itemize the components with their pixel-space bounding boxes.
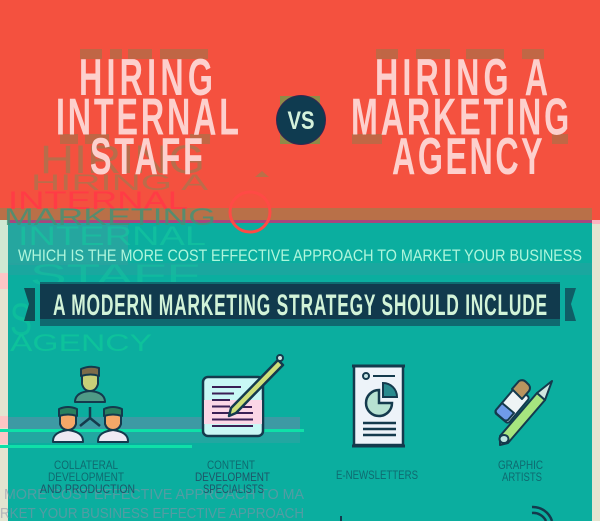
glitch ghost text: INTERNAL xyxy=(18,221,206,251)
caption: content: CONTENT xyxy=(207,458,256,472)
title: hiring internal staff xyxy=(56,49,239,186)
icon: pencil and eraser xyxy=(494,380,552,445)
caption: collateral: COLLATERAL xyxy=(54,458,118,472)
caption: graphic artists: GRAPHIC xyxy=(498,458,543,472)
caption: content xyxy=(195,458,271,496)
caption: e-newsletters: E-NEWSLETTERS xyxy=(336,468,418,482)
title: hiring a marketing agency xyxy=(351,49,569,186)
title: hiring a marketing agency: MARKETING xyxy=(351,89,569,147)
glitch ghost text: HIRING A xyxy=(31,170,209,195)
glitch ghost text: STAFF xyxy=(30,259,200,292)
caption: content: DEVELOPMENT xyxy=(195,470,271,484)
icon: team xyxy=(53,367,128,442)
caption: graphic artists xyxy=(498,458,543,484)
caption: collateral: DEVELOPMENT xyxy=(48,470,125,484)
title: hiring internal staff: INTERNAL xyxy=(56,89,239,147)
icon: e-newsletter document xyxy=(352,366,405,446)
banner: A MODERN MARKETING STRATEGY SHOULD INCLUDE xyxy=(53,289,547,322)
glitch ghost text: S xyxy=(10,294,32,345)
glitch ghost text: INTERNAL xyxy=(8,187,188,215)
title: hiring a marketing agency: AGENCY xyxy=(392,128,543,186)
icon: content notepad xyxy=(203,355,283,436)
caption: collateral xyxy=(40,458,135,496)
glitch ghost text xyxy=(4,138,216,357)
glitch bands xyxy=(0,417,304,448)
icon: partial bottom mark xyxy=(340,516,342,521)
caption: collateral: AND PRODUCTION xyxy=(40,482,135,496)
caption: graphic artists: ARTISTS xyxy=(502,470,542,484)
vs badge: VS xyxy=(288,107,314,135)
ribbon tail left xyxy=(24,288,35,321)
glitch ghost circle xyxy=(230,171,270,232)
ribbon tail right xyxy=(565,288,576,321)
title: hiring a marketing agency: HIRING A xyxy=(375,49,548,107)
banner xyxy=(24,282,576,326)
title: hiring internal staff: HIRING xyxy=(79,49,213,107)
glitch caption text: MORE COST EFFECTIVE APPROACH TO MA xyxy=(4,486,304,503)
glitch ghost text: MARKETING xyxy=(4,204,216,231)
pencil xyxy=(229,360,283,416)
icon: partial wifi xyxy=(532,507,552,521)
glitch ghost text: AGENCY xyxy=(10,330,152,357)
glitch ghost text: HIRING xyxy=(40,138,205,182)
caption: content: SPECIALISTS xyxy=(203,482,264,496)
vs badge xyxy=(276,95,326,145)
title: hiring internal staff: STAFF xyxy=(90,128,203,186)
glitch caption text xyxy=(0,486,304,521)
